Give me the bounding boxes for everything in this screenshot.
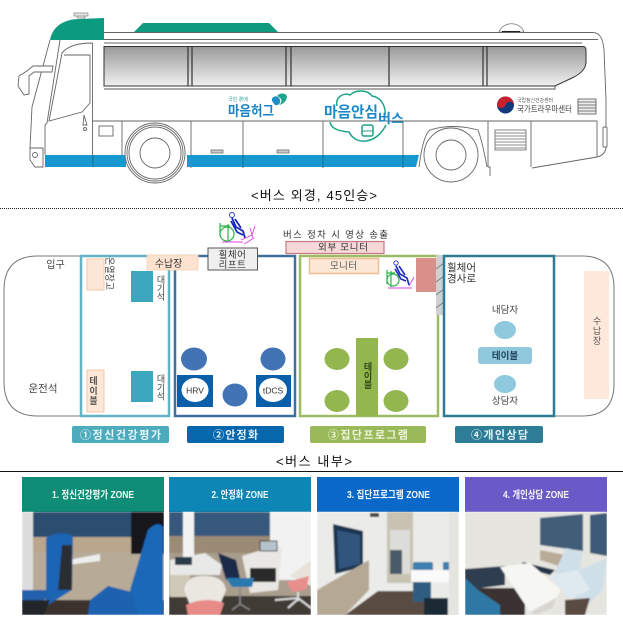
bus exterior illustration <box>18 13 607 183</box>
logo: 마음허그: 마음허그 <box>228 103 274 119</box>
rear wheel <box>424 128 478 182</box>
zone label 2: ②안정화 <box>213 428 258 442</box>
front wheel <box>125 123 185 183</box>
table: 테 <box>364 361 372 372</box>
table <box>478 347 532 364</box>
monitor: 모니터 <box>330 261 357 272</box>
ramp label: 경사로 <box>447 272 476 285</box>
side handles <box>211 150 289 153</box>
rear storage: 납 <box>593 326 601 336</box>
waiting seat upper label: 기 <box>157 284 165 294</box>
roof green cap <box>50 18 104 40</box>
rear roof dome <box>499 24 524 32</box>
fridge <box>87 259 104 290</box>
header 1 <box>22 477 164 512</box>
tDCS device: tDCS <box>263 386 283 396</box>
side vent grille <box>578 99 596 114</box>
monitor <box>310 258 378 274</box>
zone label 2 <box>187 426 284 443</box>
logo: 마음안심버스: 버스 <box>378 111 404 126</box>
wheelchair lift label <box>208 248 258 271</box>
header 2 <box>169 477 311 512</box>
window band <box>104 46 586 89</box>
header 3 <box>317 477 459 512</box>
rear vent grille <box>495 130 526 150</box>
table label: 블 <box>89 395 98 406</box>
exterior monitor: 외부 모니터 <box>318 242 368 254</box>
zone label 4: ④개인상담 <box>471 428 528 442</box>
table label: 테 <box>89 375 98 386</box>
logo: 마음허그: 국민 곁에 <box>228 96 248 103</box>
rear storage: 장 <box>593 336 601 346</box>
driver seat label: 운전석 <box>29 383 57 395</box>
header 3: 3. 집단프로그램 ZONE <box>347 489 430 501</box>
rear storage <box>584 271 609 399</box>
photo card 4 <box>465 477 607 615</box>
waiting seat upper label: 석 <box>157 292 165 302</box>
dotted divider <box>0 208 623 210</box>
exterior monitor note: 버스 정차 시 영상 송출 <box>283 229 388 241</box>
waiting seat lower label: 기 <box>157 383 165 393</box>
caption: bus exterior: <버스 외경, 45인승> <box>251 188 377 203</box>
blue stripe <box>45 155 419 167</box>
logo: 국가트라우마센터: 국가트라우마센터 <box>517 104 572 114</box>
bus floor plan <box>4 212 614 443</box>
counselor label: 상담자 <box>492 395 518 407</box>
waiting seat lower <box>131 371 153 402</box>
zone 2 room <box>175 256 295 416</box>
wheelchair lift label: 리프트 <box>219 260 246 271</box>
table <box>356 338 378 416</box>
photo card 1 <box>22 477 164 615</box>
zone 4 room <box>444 256 554 416</box>
photo card 2 <box>169 477 311 615</box>
wheelchair lift label: 휠체어 <box>219 249 246 261</box>
logo: 국가트라우마센터 <box>497 96 572 114</box>
ramp label: 휠체어 <box>447 261 476 274</box>
waiting seat lower label: 석 <box>157 392 165 402</box>
storage top: 수납장 <box>155 258 182 270</box>
plan outline <box>4 256 614 416</box>
photo 1 <box>22 512 164 615</box>
zone 3 room <box>300 256 438 416</box>
storage top <box>147 255 198 270</box>
rear storage: 수 <box>593 316 601 326</box>
header 2: 2. 안정화 ZONE <box>212 488 268 501</box>
zone label 3: ③집단프로그램 <box>328 428 408 442</box>
exterior monitor <box>286 242 384 254</box>
logo: 국가트라우마센터: 국립정신건강센터 <box>517 97 553 104</box>
roof hatch <box>74 13 88 18</box>
roof air unit <box>134 23 278 32</box>
solid divider <box>0 470 623 472</box>
zone label 1: ①정신건강평가 <box>80 428 161 442</box>
logo: 마음안심버스: 마음안심 <box>324 104 378 121</box>
zone label 1 <box>72 426 169 443</box>
stools <box>324 348 408 412</box>
table label: 이 <box>89 386 98 396</box>
HRV device: HRV <box>186 386 204 396</box>
photo 2 <box>169 512 311 615</box>
header 4 <box>465 477 607 512</box>
fridge label: 온열장고 <box>103 257 115 290</box>
waiting seat upper label: 대 <box>157 275 165 285</box>
zone label 3 <box>310 426 426 443</box>
photo 4 <box>465 512 607 615</box>
zone label 4 <box>455 426 543 443</box>
icon: wheelchair on lift <box>220 212 255 244</box>
photo 3 <box>317 512 459 615</box>
waiting seat lower label: 대 <box>157 374 165 384</box>
client label: 내담자 <box>492 304 518 316</box>
front windshield and door <box>18 40 607 176</box>
waiting seat upper <box>131 271 153 302</box>
table: 이 <box>364 371 372 381</box>
HRV device <box>177 375 213 407</box>
table: 테이블 <box>492 350 518 362</box>
caption: bus interior: <버스 내부> <box>276 454 352 469</box>
roof and body lines <box>104 32 606 168</box>
photo card 3 <box>317 477 459 615</box>
table <box>87 370 104 412</box>
wheelchair ramp <box>436 255 444 315</box>
header 4: 4. 개인상담 ZONE <box>503 488 569 501</box>
icon: wheelchair in zone 3 <box>387 261 414 288</box>
lift door <box>416 258 437 292</box>
logo: 마음허그 <box>228 93 287 119</box>
header 1: 1. 정신건강평가 ZONE <box>52 488 134 501</box>
tDCS device <box>256 375 291 407</box>
zone 1 room <box>81 256 169 416</box>
entrance label: 입구 <box>46 258 65 271</box>
logo: 마음안심버스 <box>324 91 404 141</box>
table: 블 <box>364 379 372 390</box>
